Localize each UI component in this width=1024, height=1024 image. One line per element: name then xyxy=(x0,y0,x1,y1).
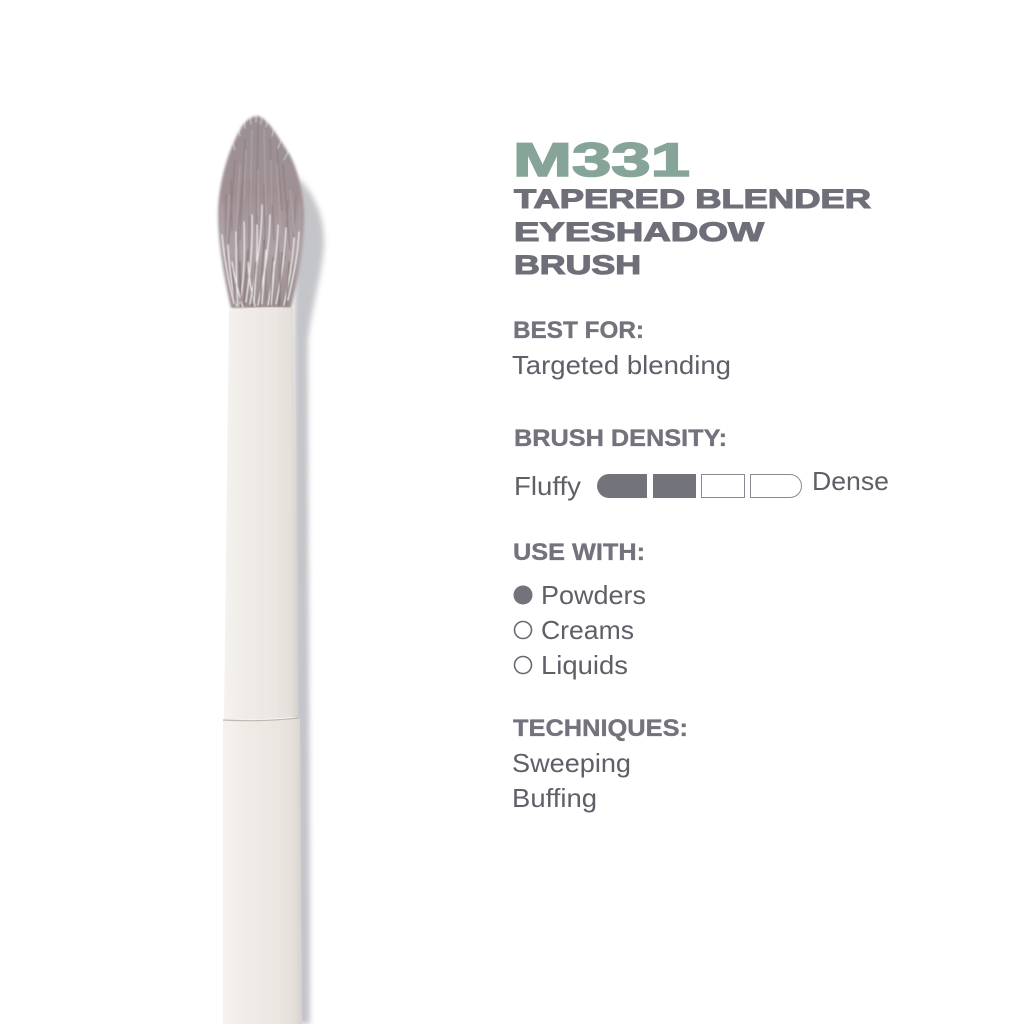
subtitle: product name xyxy=(514,184,871,280)
label: fluffy: Fluffy xyxy=(514,471,581,501)
upper handle xyxy=(224,307,298,720)
option: liquids: Liquids xyxy=(541,650,628,680)
lower handle xyxy=(223,718,302,1024)
subtitle: product name: TAPERED BLENDER xyxy=(514,184,871,214)
section: brush density: BRUSH DENSITY: xyxy=(514,425,727,452)
subtitle: product name: EYESHADOW xyxy=(514,217,765,247)
section: techniques: Buffing xyxy=(512,783,597,813)
subtitle: product name: BRUSH xyxy=(514,250,641,280)
option: creams: Creams xyxy=(541,615,634,645)
option: powders: Powders xyxy=(541,580,646,610)
brush illustration xyxy=(218,112,324,1024)
label: dense: Dense xyxy=(812,466,889,496)
section: techniques xyxy=(512,715,688,813)
ferrule seam xyxy=(223,718,299,721)
section: use with xyxy=(513,539,646,680)
section: best for: Targeted blending xyxy=(512,350,731,380)
section: use with: USE WITH: xyxy=(513,539,645,566)
density scale xyxy=(597,474,802,498)
section: best for xyxy=(512,317,731,380)
bristles xyxy=(218,112,304,308)
section: techniques: Sweeping xyxy=(512,748,631,778)
section: brush density xyxy=(514,425,889,501)
title: product code: M331 xyxy=(513,133,690,186)
section: best for: BEST FOR: xyxy=(513,317,644,344)
cast shadow xyxy=(294,178,324,1024)
section: techniques: TECHNIQUES: xyxy=(513,715,688,742)
